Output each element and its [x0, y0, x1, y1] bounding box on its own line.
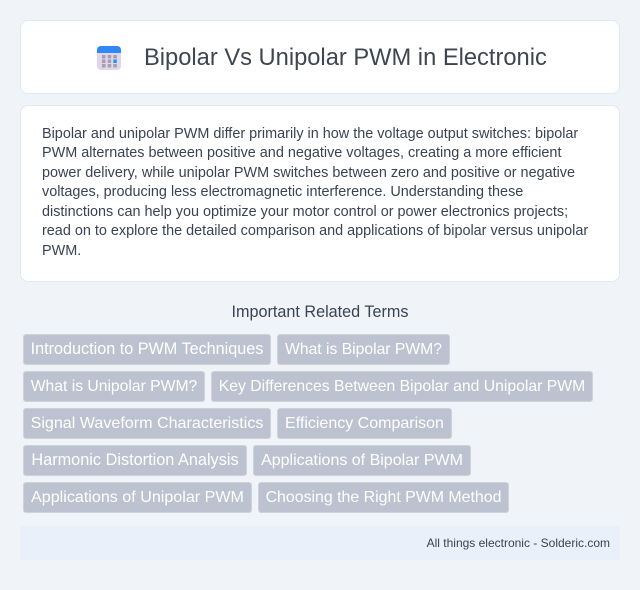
tag: Signal Waveform Characteristics	[31, 414, 263, 432]
tag: Harmonic Distortion Analysis	[31, 451, 239, 469]
icon: calendar	[97, 46, 121, 70]
tag	[23, 334, 271, 365]
tag	[277, 334, 450, 365]
text block: description: distinctions can help you optimize your motor control or power electronics projects;	[42, 204, 568, 220]
tag	[23, 408, 271, 439]
text block: description: PWM alternates between positive and negative voltages, creating a more efficient	[42, 145, 561, 161]
tag: Introduction to PWM Techniques	[31, 340, 263, 358]
text block: description: power delivery, while unipolar PWM switches between zero and positive or negative	[42, 165, 575, 181]
heading: related terms: Important Related Terms	[232, 303, 408, 321]
tag: What is Unipolar PWM?	[31, 378, 197, 395]
footer	[20, 526, 620, 560]
tag: Applications of Unipolar PWM	[31, 488, 244, 506]
tag	[23, 445, 247, 476]
panel: header	[20, 20, 620, 94]
tag: Efficiency Comparison	[285, 415, 444, 432]
text block: description: PWM.	[42, 243, 81, 259]
text block: description: read on to explore the detailed comparison and applications of bipolar versus unipolar	[42, 223, 588, 239]
tag	[277, 408, 452, 439]
tag	[23, 482, 252, 513]
title: Bipolar Vs Unipolar PWM in Electronic	[144, 45, 547, 71]
tag	[253, 445, 471, 476]
text block: description: Bipolar and unipolar PWM differ primarily in how the voltage output switches: bipolar	[42, 126, 578, 142]
tag: Applications of Bipolar PWM	[261, 452, 463, 469]
tag list	[23, 334, 593, 513]
tag: Key Differences Between Bipolar and Unipolar PWM	[219, 378, 585, 395]
tag: Choosing the Right PWM Method	[266, 489, 501, 506]
text block: description	[42, 126, 588, 259]
tag: What is Bipolar PWM?	[285, 341, 442, 358]
tag	[258, 482, 509, 513]
footer text: All things electronic - Solderic.com	[427, 536, 610, 550]
tag	[211, 371, 593, 402]
tag	[23, 371, 205, 402]
panel: description	[20, 105, 620, 282]
text block: description: voltages, producing less electromagnetic interference. Understanding these	[42, 184, 523, 200]
